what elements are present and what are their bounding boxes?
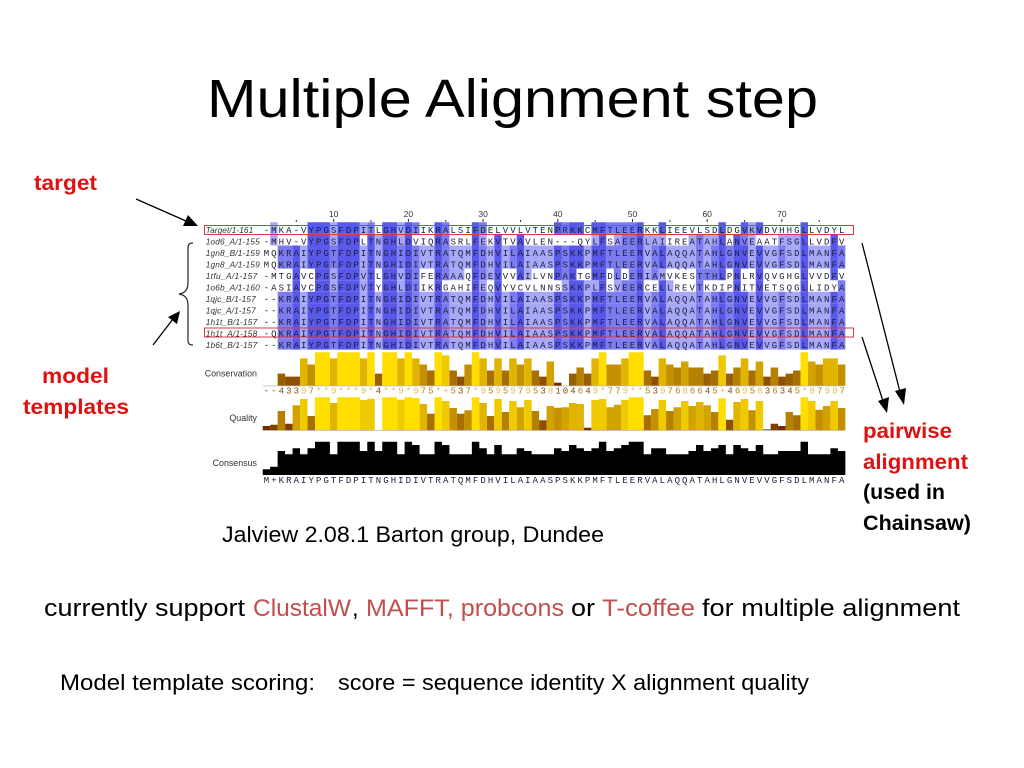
arrow: target to target row <box>136 199 198 226</box>
sequence names <box>206 225 260 350</box>
highlight box: 1h1t_A row <box>204 328 854 337</box>
sequence names: 1h1t_B/1-157 <box>206 317 258 327</box>
alignment panel <box>204 209 854 486</box>
text: supported aligners: T-coffee <box>602 595 695 622</box>
label: pairwise alignment (used in Chainsaw) <box>863 420 971 535</box>
sequence names: Target/1-161 <box>206 225 253 235</box>
text: supported aligners: currently support <box>44 595 245 622</box>
column ruler: 40 <box>553 209 563 219</box>
aligned sequences: -ASIAVCPGSFDPVTYGHLDIIKRGAHIFEQVYVCVLNNSSKKPLFSVEERCELLREVTKDIPNITVETSQGLLIDYA <box>264 284 846 294</box>
column ruler: 20 <box>404 209 413 219</box>
aligned sequences: -QKRAIYPGTFDPITNGHIDIVTRATQMFDHVILAIAASPSKKPMFTLEERVALAQQATAHLGNVEVVGFSDLMANFA <box>264 330 846 340</box>
column ruler: 70 <box>777 209 787 219</box>
sequence names: 1od6_A/1-155 <box>206 236 260 246</box>
text: model template scoring <box>60 670 809 695</box>
text: supported aligners: or <box>571 595 595 622</box>
sequence names: 1h1t_A/1-158 <box>206 328 258 338</box>
column ruler <box>296 209 819 222</box>
sequence names: 1qjc_B/1-157 <box>206 294 256 304</box>
text: model template scoring: Model template scoring: <box>60 670 315 695</box>
aligned sequences: --KRAIYPGTFDPITNGHIDIVTRATQMFDHVILAIAASPSKKPMFTLEERVALAQQATAHLGNVEVVGFSDLMANFA <box>264 295 846 305</box>
aligned sequences: -MTGAVCPGSFDPVTLGHVDIFERAAAQFDEVVVAILVNPAKTGMFDLDERIAMVKESTTHLPNLRVQVGHGLVVDFV <box>264 272 846 282</box>
sequence names: 1qjc_A/1-157 <box>206 305 256 315</box>
text: supported aligners: ClustalW <box>253 595 351 622</box>
residue shading <box>270 228 845 344</box>
aligned sequences: -MHV-VYPGSFDPLTNGHLDVIQRASRLFEKVTVAVLEN---QYLFSAEERLAIIREATAHLANVEAATFSGLLVDFV <box>264 237 846 247</box>
column ruler: 30 <box>478 209 488 219</box>
text: supported aligners: for multiple alignment <box>702 595 960 622</box>
conservation baseline <box>263 385 845 387</box>
arrow: alignment to pairwise label (lower) <box>862 337 889 413</box>
column ruler: 60 <box>702 209 712 219</box>
aligned sequences: MQKRAIYPGTFDPITNGHIDIVTRATQMFDHVILAIAASPSKKPMFTLEERVALAQQATAHLGNVEVVGFSDLMANFA <box>264 260 846 270</box>
text: model template scoring: score = sequence identity X alignment quality <box>338 670 809 695</box>
aligned sequences: --KRAIYPGTFDPITNGHIDIVTRATQMFDHVILAIAASPSKKPMFTLEERVALAQQATAHLGNVEVVGFSDLMANFA <box>264 306 846 316</box>
chart: quality bars <box>266 397 842 430</box>
text: supported aligners <box>44 595 960 622</box>
consensus sequence: M+KRAIYPGTFDPITNGHIDIVTRATQMFDHVILAIAASPSKKPMFTLEERVALAQQATAHLGNVEVVGFSDLMANFA <box>264 476 846 486</box>
arrow: model templates to bracket <box>153 311 180 345</box>
sequence names: 1b6t_B/1-157 <box>206 340 258 350</box>
highlight box: target row <box>204 226 854 234</box>
chart: conservation bars <box>281 352 842 386</box>
column ruler: 50 <box>628 209 637 219</box>
column ruler: 10 <box>329 209 339 219</box>
track label: conservation: Conservation <box>205 368 257 378</box>
aligned sequences: --KRAIYPGTFDPITNGHIDIVTRATQMFDHVILAIAASPSKKPMFTLEERVALAQQATAHLGNVEVVGFSDLMANFA <box>264 318 846 328</box>
track label: consensus: Consensus <box>213 458 258 468</box>
chart: consensus histogram <box>263 442 845 475</box>
caption: Jalview credit: Jalview 2.08.1 Barton group, Dundee <box>222 522 604 547</box>
sequence names: 1o6b_A/1-160 <box>206 282 260 292</box>
quality baseline <box>263 430 845 432</box>
bracket: model templates <box>179 243 193 345</box>
aligned sequences: --KRAIYPGTFDPITNGHIDIVTRATQMFDHVILAIAASPSKKPMFTLEERVALAQQATAHLGNVEVVGFSDLMANFA <box>264 341 846 351</box>
aligned sequences: MQKRAIYPGTFDPITNGHIDIVTRATQMFDHVILAIAASPSKKPMFTLEERVALAQQATAHLGNVEVVGFSDLMANFA <box>264 249 846 259</box>
title: Multiple Alignment step <box>207 69 818 129</box>
label: target: target <box>34 172 97 195</box>
aligned sequences: -MKA-VYPGSFDPITLGHVDIIKRALSIFDELVVLVTENPRKKCMFTLEERKKLIEEVLSDLDGVKVDVHHGLLVDYL <box>264 226 846 236</box>
sequence names: 1gn8_B/1-159 <box>206 248 260 258</box>
label: pairwise alignment (used in Chainsaw): alignment <box>863 451 968 474</box>
sequence names: 1tfu_A/1-157 <box>206 271 258 281</box>
conservation scores: --43397**9***9*4**9*975*+537*9595979538104649*779**5397686645+4695836345*87997 <box>264 387 847 397</box>
text: supported aligners: , <box>352 595 359 622</box>
track label: quality: Quality <box>229 413 258 423</box>
aligned sequences <box>264 226 846 351</box>
sequence names: 1gn8_A/1-159 <box>206 259 260 269</box>
label: model templates <box>23 365 129 419</box>
label: pairwise alignment (used in Chainsaw): Chainsaw) <box>863 512 971 535</box>
label: pairwise alignment (used in Chainsaw): (used in <box>863 481 945 504</box>
label: pairwise alignment (used in Chainsaw): pairwise <box>863 420 952 443</box>
arrow: alignment to pairwise label (upper) <box>862 243 906 405</box>
label: model templates: model <box>42 365 109 388</box>
text: supported aligners: MAFFT, probcons <box>366 595 564 622</box>
label: model templates: templates <box>23 396 129 419</box>
